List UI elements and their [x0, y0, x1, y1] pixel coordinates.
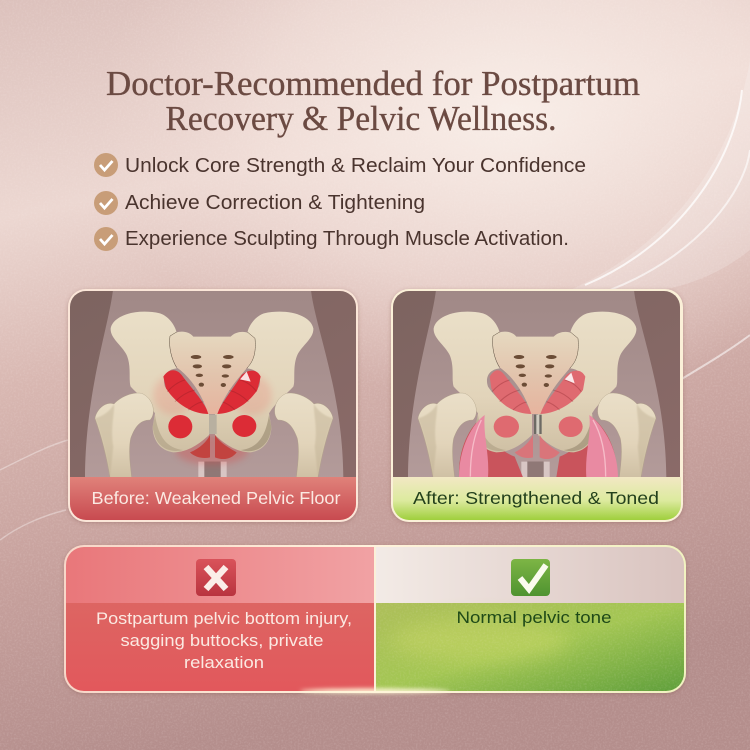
panel: after: [391, 287, 683, 522]
label bar: after: [393, 477, 681, 520]
problem text: sagging buttocks, private: [120, 632, 324, 650]
icon: green check: [511, 559, 550, 596]
problem text: [96, 610, 352, 672]
illustration: weakened pelvis: [70, 287, 356, 480]
label bar: before: Before: Weakened Pelvic Floor: [92, 488, 341, 508]
panel: before: [68, 287, 358, 522]
comparison panel: [64, 545, 686, 694]
label bar: before: [70, 477, 356, 520]
bullet: core strength: Unlock Core Strength & Reclaim Your Confidence: [125, 154, 586, 177]
title: Doctor-Recommended for Postpartum: [106, 64, 640, 103]
problem text: relaxation: [184, 654, 264, 672]
normal text: Normal pelvic tone: [456, 609, 612, 627]
bullet: sculpting: Experience Sculpting Through Muscle Activation.: [125, 227, 569, 250]
label bar: after: After: Strengthened & Toned: [413, 488, 659, 508]
benefits list: [94, 153, 586, 251]
problem text: Postpartum pelvic bottom injury,: [96, 610, 352, 628]
bullet: correction: Achieve Correction & Tightening: [125, 191, 425, 214]
column: normal: [456, 559, 612, 627]
illustration: strengthened pelvis: [393, 287, 681, 480]
title: [106, 64, 640, 138]
title: Recovery & Pelvic Wellness.: [166, 99, 556, 138]
icon: red x: [196, 559, 236, 596]
column: problem: [96, 559, 352, 672]
